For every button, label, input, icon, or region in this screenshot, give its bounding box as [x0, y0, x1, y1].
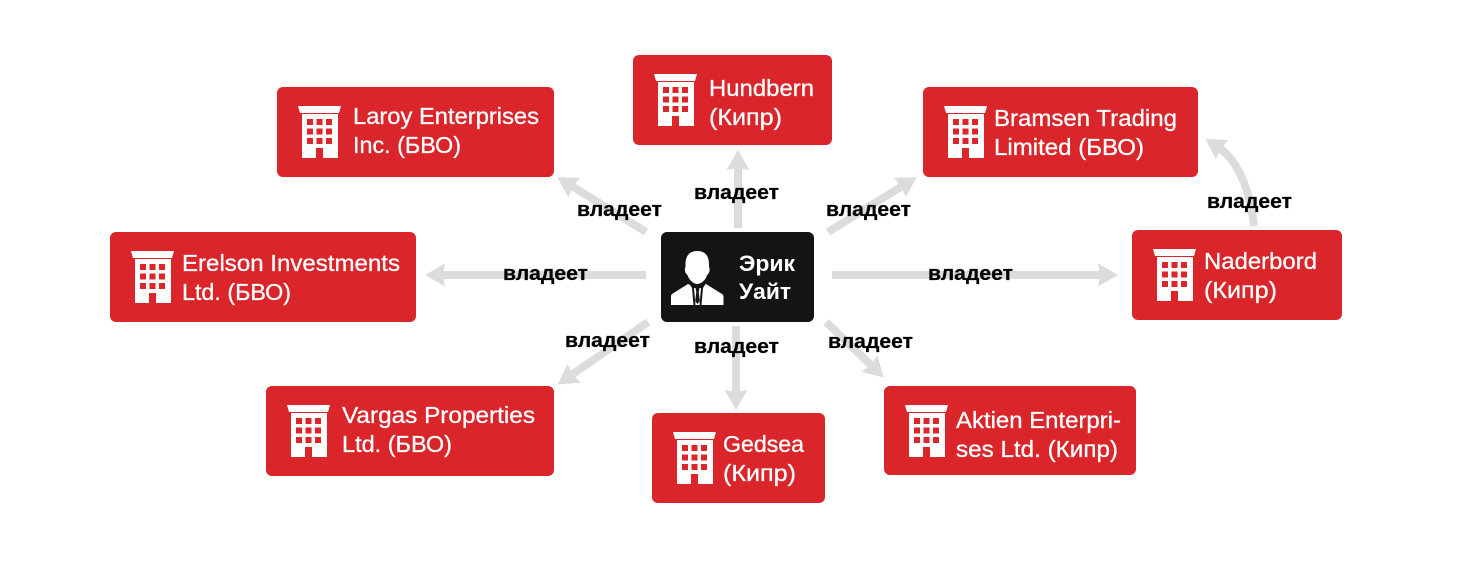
company: Bramsen Trading: Limited (БВО) [994, 134, 1144, 160]
label: владеет (Vargas): владеет [565, 330, 650, 352]
label: владеет (Gedsea): владеет [694, 336, 779, 358]
company: Naderbord: (Кипр) [1204, 277, 1277, 303]
icon: building [654, 74, 697, 126]
label: владеет (Naderbord to Bramsen): владеет [1207, 191, 1292, 213]
company: Aktien Enterprises [884, 386, 1136, 475]
arrow: to Laroy Enterprises [570, 185, 646, 232]
company: Gedsea: (Кипр) [723, 460, 796, 486]
label: владеет (Laroy): владеет [577, 199, 662, 221]
label: владеет (Aktien): владеет [828, 331, 913, 353]
company: Naderbord [1132, 230, 1342, 320]
arrow: to Hundbern [734, 165, 742, 228]
label: владеет (Erelson): владеет [503, 263, 588, 285]
company name: Bramsen Trading [994, 105, 1177, 131]
company: Gedsea [652, 413, 825, 503]
label: владеет (Hundbern): владеет [694, 182, 779, 204]
company: Erelson Investments: Ltd. (БВО) [182, 279, 291, 305]
central person: Эрик Уайт [661, 232, 814, 322]
icon: building [298, 106, 341, 158]
icon: building [131, 251, 174, 303]
company name: Vargas Properties [342, 402, 535, 428]
icon: building [905, 405, 948, 457]
company name: Hundbern [709, 75, 814, 101]
company: Laroy Enterprises [277, 87, 554, 177]
company: Vargas Properties [266, 386, 554, 476]
arrow: to Vargas Properties [570, 322, 648, 376]
company name: Aktien Enterpri- [956, 407, 1121, 433]
company: Vargas Properties: Ltd. (БВО) [342, 431, 452, 457]
arrow: Naderbord to Bramsen Trading [1218, 147, 1254, 226]
company: Hundbern [633, 55, 832, 145]
company: Laroy Enterprises: Inc. (БВО) [353, 132, 461, 158]
arrow: to Naderbord [832, 271, 1103, 279]
icon: building [1153, 249, 1196, 301]
arrow: to Erelson Investments [440, 271, 646, 279]
company: Bramsen Trading [923, 87, 1198, 177]
icon: building [287, 405, 330, 457]
label: владеет (Bramsen): владеет [826, 199, 911, 221]
company name: Laroy Enterprises [353, 103, 539, 129]
arrow: to Bramsen Trading [828, 185, 904, 232]
icon: building [944, 106, 987, 158]
arrow: to Aktien Enterprises [826, 322, 873, 367]
company: Erelson Investments [110, 232, 416, 322]
company: Aktien Enterprises: ses Ltd. (Кипр) [956, 436, 1118, 462]
icon: person silhouette [671, 251, 724, 305]
arrow: to Gedsea [732, 326, 740, 395]
icon: building [673, 432, 716, 484]
company name: Erelson Investments [182, 250, 400, 276]
company: Hundbern: (Кипр) [709, 104, 782, 130]
name: Эрик [739, 251, 796, 276]
company name: Gedsea [723, 431, 804, 457]
company name: Naderbord [1204, 248, 1317, 274]
label: владеет (Naderbord): владеет [928, 263, 1013, 285]
central person: Эрик Уайт: Уайт [739, 279, 791, 304]
